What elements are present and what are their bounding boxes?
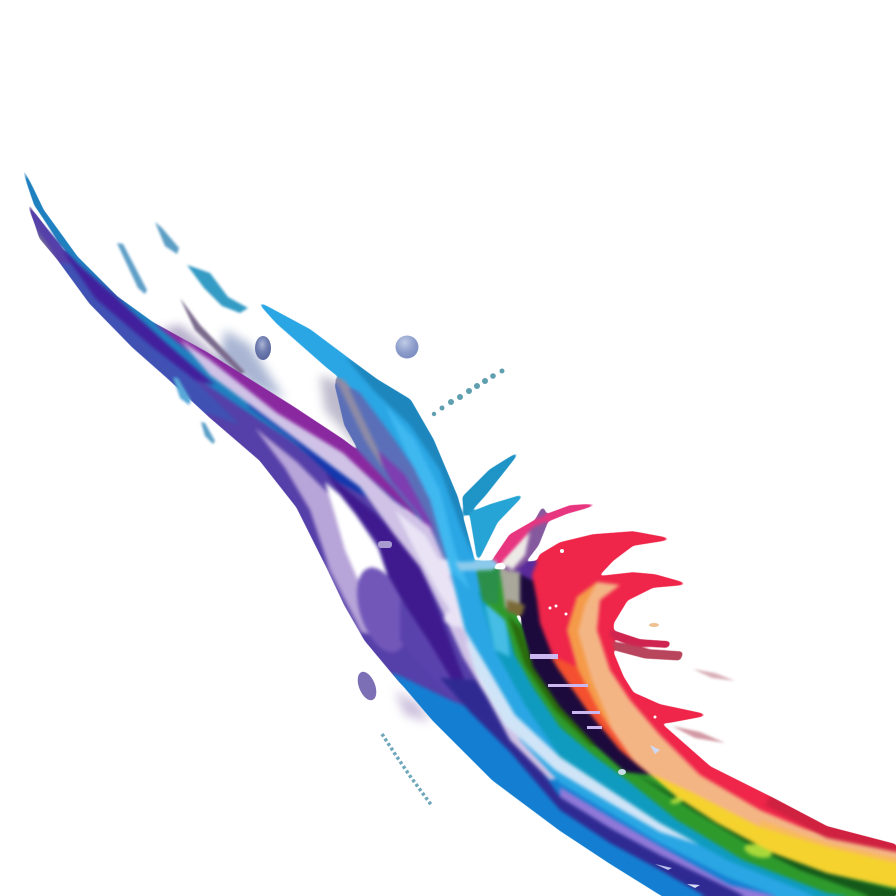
- dotted trail upper: [432, 368, 504, 416]
- faded pink wisp right: [693, 669, 735, 681]
- tail purple inner stripe: [62, 250, 215, 385]
- fan dark outer strip: [345, 357, 473, 557]
- gray slash upper left: [180, 298, 245, 374]
- purple streaks in slate area: [372, 445, 440, 560]
- orange speck: [649, 623, 659, 627]
- green-gray glitch blocks: [455, 561, 525, 615]
- fan bright inner strip: [385, 405, 470, 590]
- blue upper fan: [258, 302, 850, 896]
- outer blue band: [392, 672, 780, 896]
- cyan patch: [485, 605, 510, 657]
- deep purple band: [325, 472, 470, 695]
- small side dash: [201, 422, 215, 444]
- droplet left: [255, 336, 271, 360]
- brush dash 3: [187, 265, 248, 313]
- lilac strip beside gap: [255, 428, 385, 640]
- blue fin 2: [470, 495, 523, 560]
- red body with two crescents: [532, 532, 896, 856]
- orange-red stripe: [550, 655, 657, 780]
- brush dash 2: [155, 222, 179, 254]
- lime highlights: [669, 794, 773, 860]
- navy band: [440, 678, 745, 896]
- white patch under pink fin: [503, 532, 530, 570]
- purple section: [510, 560, 545, 600]
- dotted trail lower: [382, 734, 432, 806]
- pink fin: [493, 504, 599, 563]
- peach band: [567, 582, 896, 863]
- white gap: [325, 482, 388, 580]
- black band: [518, 573, 650, 775]
- dark olive green stripe: [508, 615, 597, 747]
- side dash: [173, 377, 191, 405]
- red wisp 1: [610, 630, 670, 647]
- green band: [482, 575, 896, 896]
- teal band: [478, 590, 850, 896]
- purple body: [28, 205, 540, 785]
- white flecks: [548, 549, 700, 888]
- dark green blocks: [633, 772, 896, 896]
- lilac band highlights: [395, 510, 530, 745]
- tail blue-violet lower band: [60, 262, 240, 425]
- lilac main band: [180, 340, 577, 780]
- dark blue tail inset: [232, 382, 368, 498]
- magenta band: [153, 323, 430, 525]
- blue tail band: [20, 162, 372, 500]
- lilac thin stripe: [560, 787, 777, 896]
- dark red right end: [765, 797, 896, 856]
- red wisp 2: [612, 642, 683, 660]
- purple fin: [505, 507, 548, 575]
- blue fin 1: [463, 452, 519, 517]
- droplet lower: [354, 669, 380, 703]
- white-lilac streak in lower band: [465, 630, 700, 845]
- lower purple wedge: [400, 600, 470, 700]
- lilac dashes: [378, 541, 602, 729]
- gray slash: [335, 378, 384, 470]
- droplet right: [396, 336, 418, 358]
- yellow band: [650, 773, 896, 888]
- brush dash 1: [117, 243, 147, 294]
- orange edge in peach: [567, 582, 612, 728]
- inner slate area between fan and lilac: [335, 383, 452, 575]
- gray smudges behind the stroke: [160, 325, 430, 722]
- faded pink wisp lower: [672, 726, 725, 743]
- tail gray wisp: [26, 195, 80, 272]
- yellow-orange blend: [760, 820, 896, 863]
- purple lobe: [347, 561, 417, 659]
